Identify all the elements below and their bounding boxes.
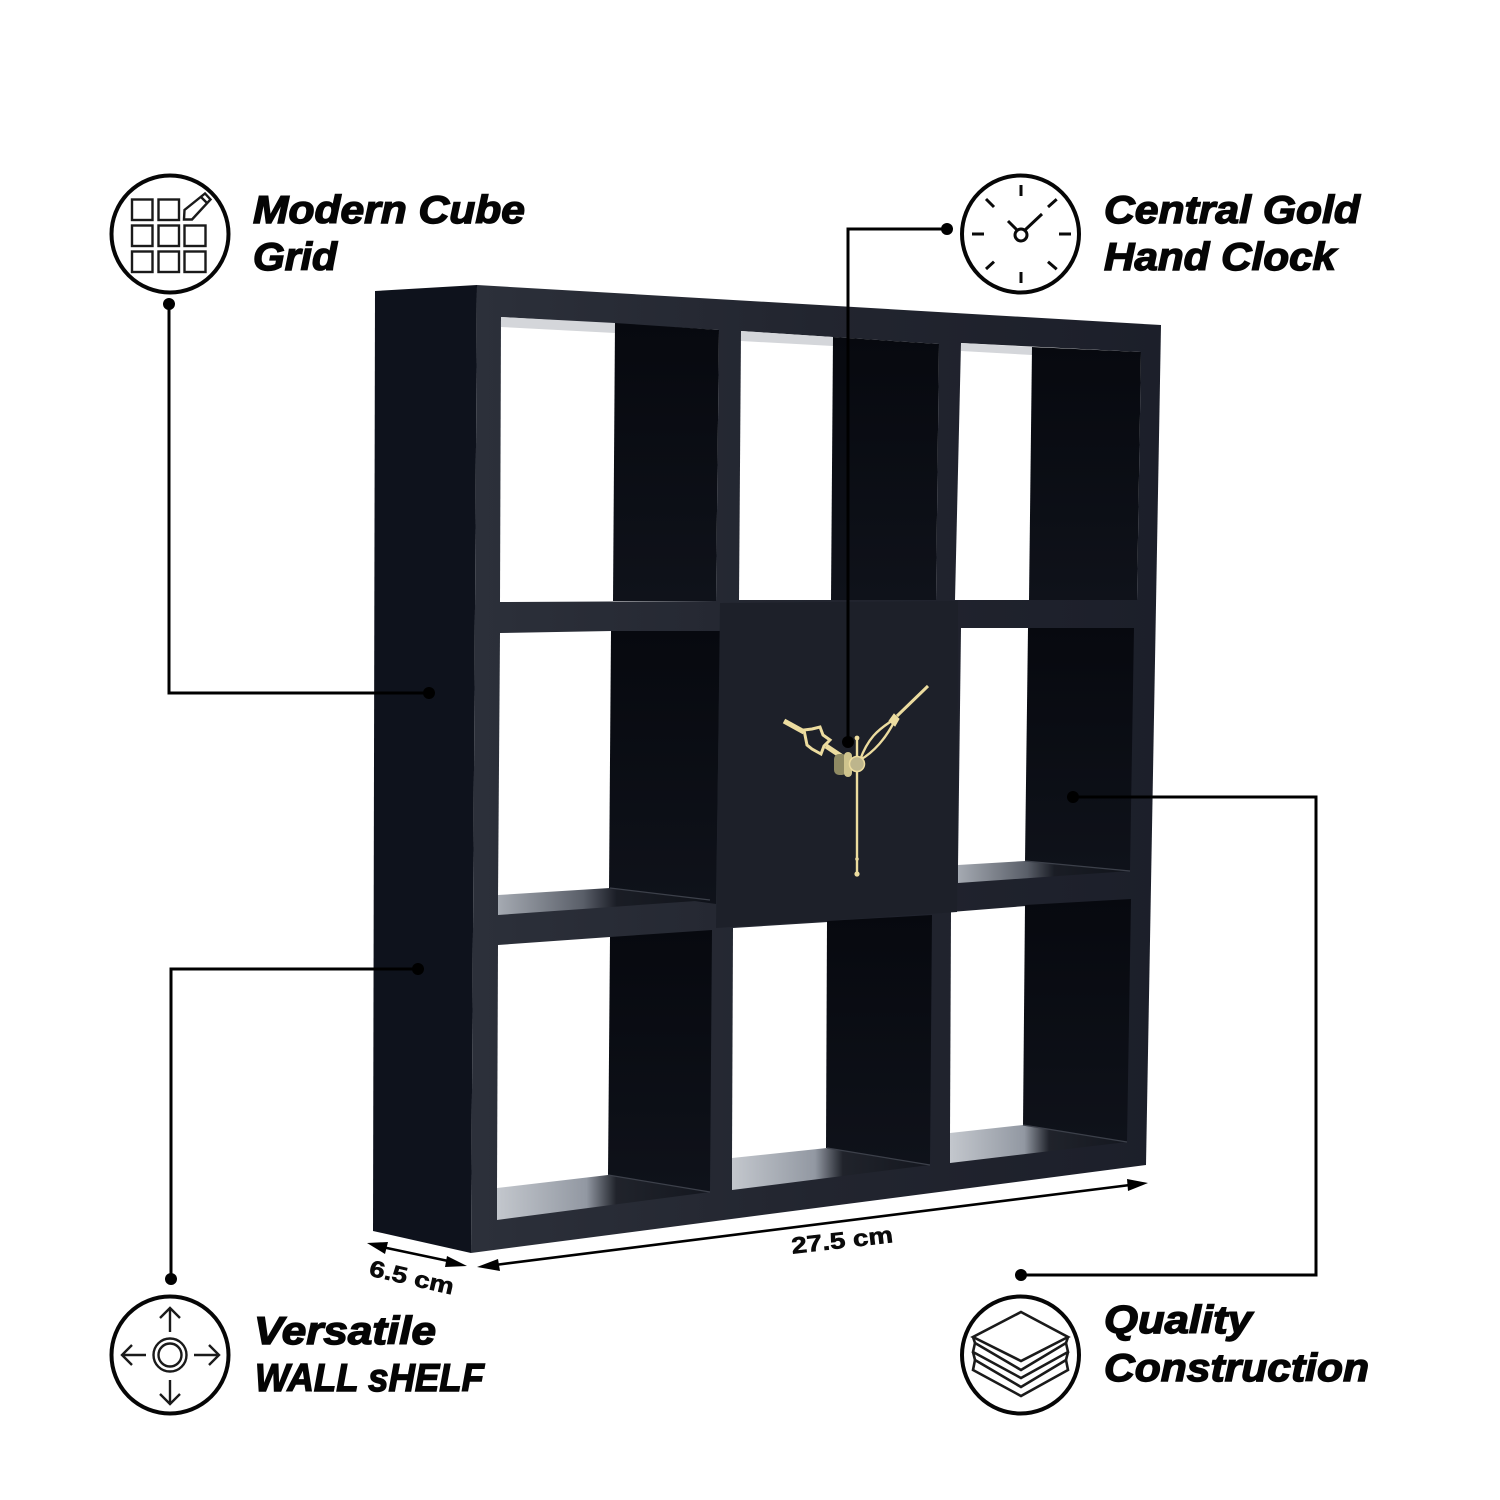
- feature: versatile wall shelf: [112, 1296, 485, 1414]
- dimension label: 6.5 cm: 6.5 cm: [367, 1255, 457, 1300]
- gold clock hands: [784, 686, 928, 877]
- shelf front frame: [471, 285, 1161, 1253]
- feature: central gold hand clock: [962, 176, 1361, 292]
- heading: Versatile WALL sHELF: Versatile: [254, 1310, 436, 1353]
- product: cube grid wall shelf clock: [373, 285, 1161, 1253]
- second hand: [854, 736, 860, 877]
- heading: Modern Cube Grid: Grid: [253, 236, 338, 279]
- heading: Quality Construction: [1104, 1299, 1369, 1390]
- bottom-middle cube: [732, 915, 932, 1190]
- dimension label: 27.5 cm: 27.5 cm: [790, 1221, 894, 1259]
- heading: Quality Construction: Quality: [1104, 1299, 1255, 1342]
- bottom-left cube: [497, 930, 712, 1220]
- dimension arrow: width: [477, 1179, 1148, 1271]
- heading: Modern Cube Grid: Modern Cube: [253, 189, 525, 232]
- leader line: modern cube grid: [163, 298, 435, 699]
- heading: Versatile WALL sHELF: [254, 1310, 485, 1400]
- heading: Central Gold Hand Clock: Hand Clock: [1104, 236, 1338, 279]
- feature: quality construction: [962, 1296, 1369, 1414]
- top-right cube: [955, 343, 1141, 600]
- minute hand: [860, 686, 928, 760]
- feature: modern cube grid: [112, 176, 525, 292]
- heading: Central Gold Hand Clock: Central Gold: [1104, 189, 1361, 232]
- heading: Versatile WALL sHELF: WALL sHELF: [255, 1357, 485, 1400]
- icon: four-way arrows: [112, 1296, 228, 1414]
- icon: cube grid and pencil: [112, 176, 228, 292]
- leader line: central gold hand clock: [842, 223, 953, 748]
- heading: Modern Cube Grid: [253, 189, 525, 279]
- middle-left cube: [498, 631, 720, 915]
- dimension arrow: depth: [367, 1242, 467, 1267]
- bottom-right cube: [950, 899, 1131, 1163]
- hour hand: [784, 721, 850, 762]
- top-middle cube: [739, 331, 939, 600]
- heading: Quality Construction: Construction: [1104, 1347, 1369, 1390]
- middle-right cube: [958, 628, 1134, 883]
- clock hub: [834, 752, 864, 777]
- leader line: quality construction: [1015, 791, 1316, 1281]
- center clock block: [716, 601, 958, 928]
- icon: stacked layers: [962, 1296, 1079, 1414]
- icon: clock face: [962, 176, 1079, 292]
- top-left cube: [500, 317, 719, 602]
- heading: Central Gold Hand Clock: [1104, 189, 1361, 279]
- shelf side panel: [373, 285, 477, 1253]
- leader line: versatile wall shelf: [165, 963, 424, 1285]
